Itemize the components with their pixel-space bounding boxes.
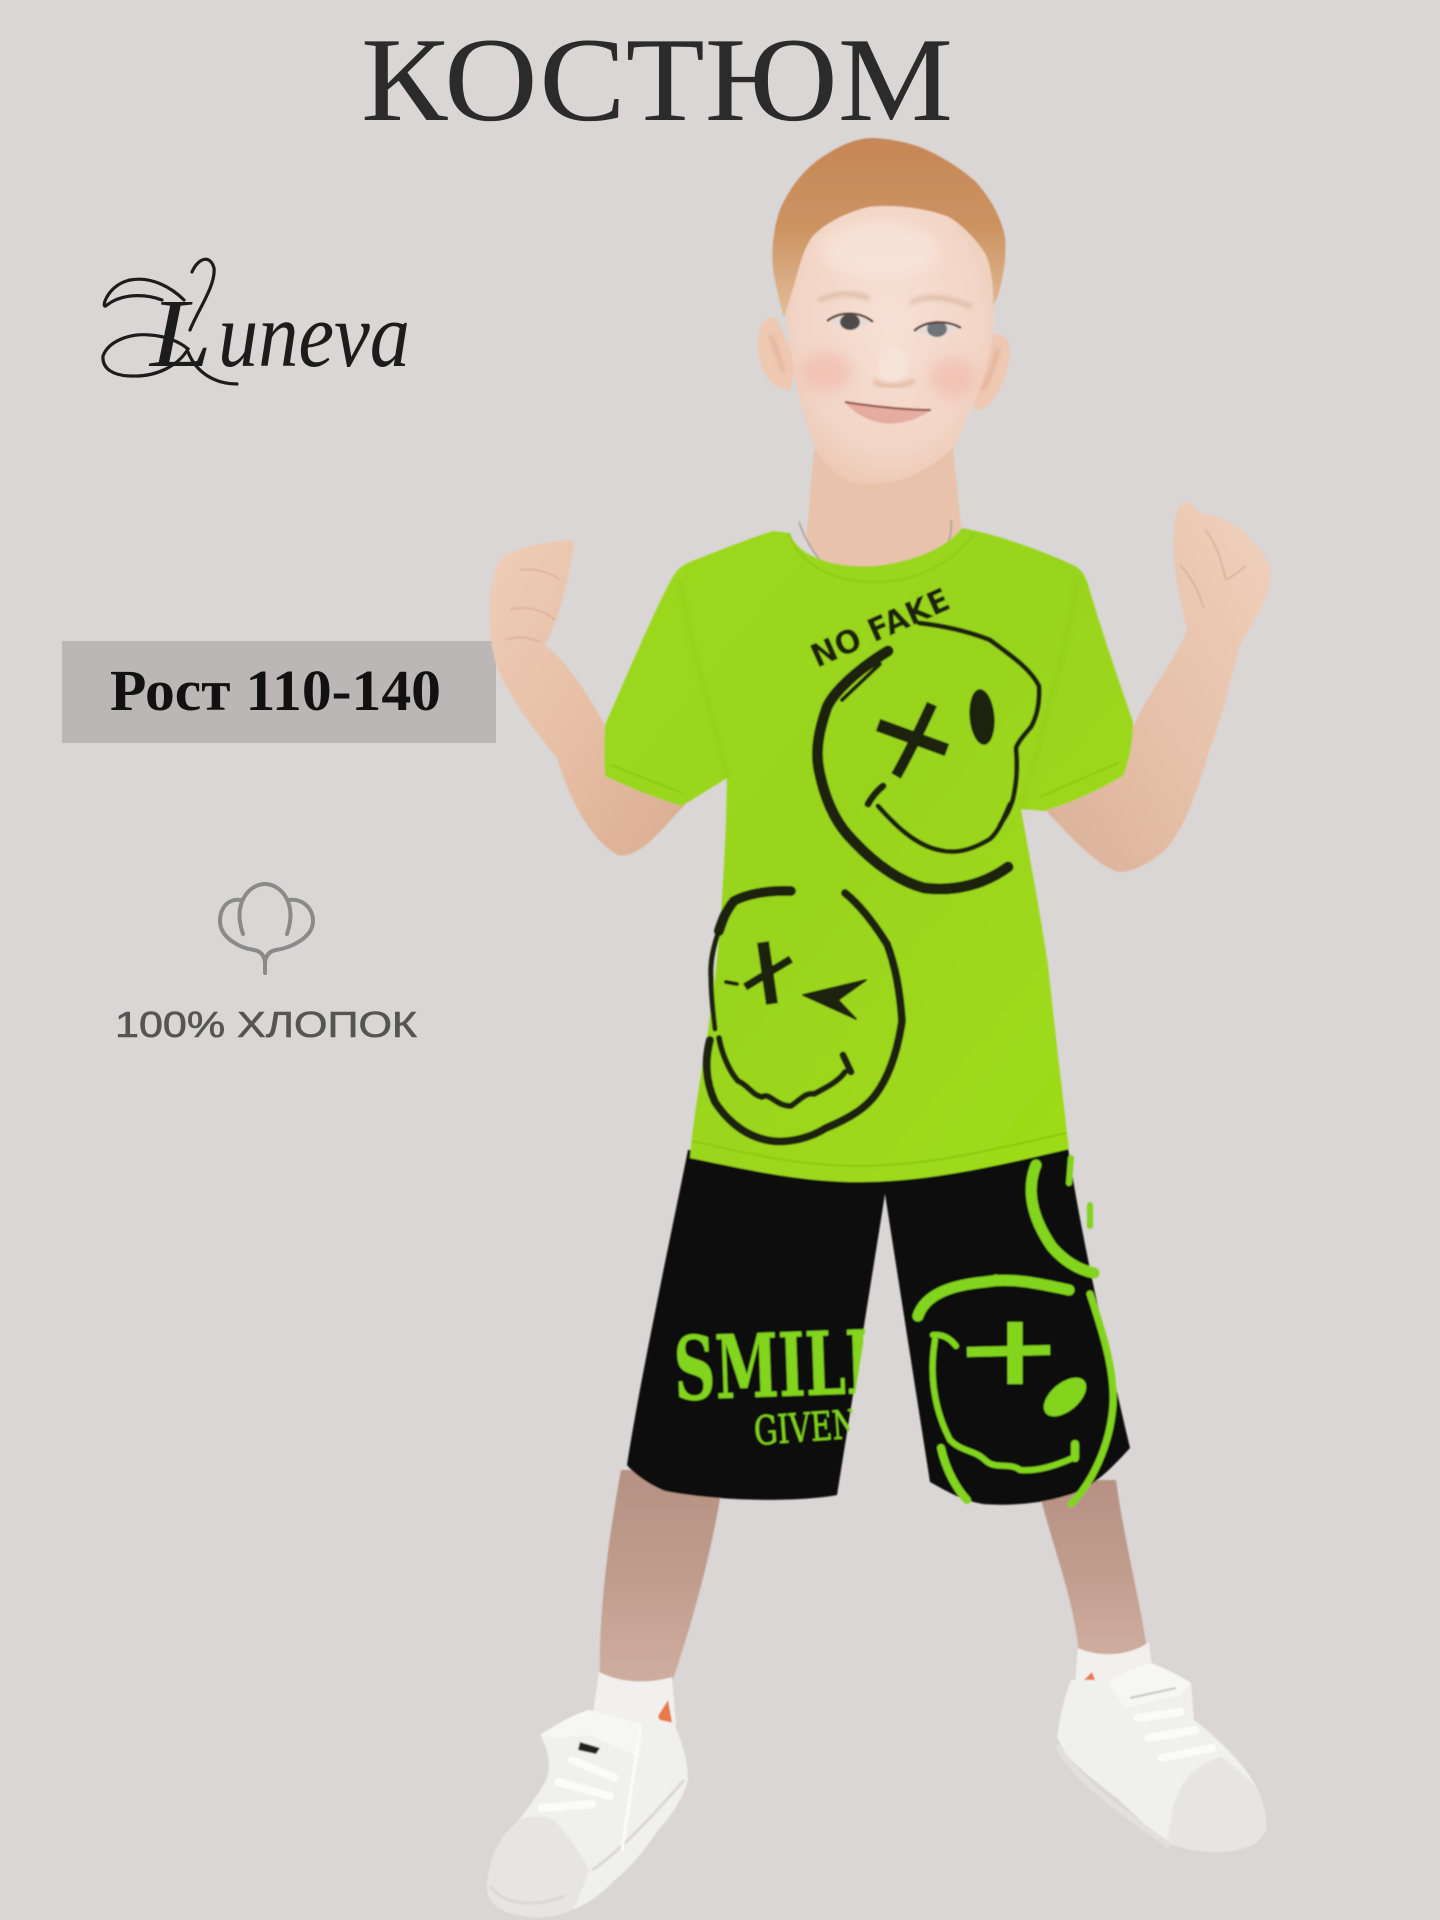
legs: [600, 1470, 1148, 1682]
shorts print: SMILE GIVEN: GIVEN: [752, 1402, 859, 1455]
icon: cotton: [220, 884, 313, 973]
socks: [592, 1642, 1152, 1740]
hair: [772, 138, 1005, 318]
neck: [806, 440, 962, 575]
arms: [489, 502, 1271, 872]
shorts print: large smiley: [918, 1276, 1113, 1504]
nose: [878, 348, 908, 382]
shorts print: SMILE GIVEN: [676, 1328, 866, 1446]
shorts: [627, 1140, 1130, 1505]
shorts print: SMILE GIVEN: SMILE: [672, 1310, 891, 1421]
boy figure: [487, 138, 1271, 1917]
right shoe: [1057, 1663, 1266, 1852]
cotton label: 100% ХЛОПОК: [115, 1004, 417, 1045]
eyebrows: [820, 294, 970, 306]
brand logo: Luneva: [103, 259, 410, 388]
left shoe: [487, 1710, 688, 1917]
head: [784, 190, 996, 484]
height label: [62, 641, 496, 743]
brand logo: Luneva: L: [148, 280, 212, 388]
mouth: [845, 402, 931, 424]
height label: Рост 110-140: [110, 658, 441, 723]
necklace: [799, 520, 951, 568]
brand logo: Luneva: uneva: [218, 284, 410, 386]
shorts print: upper smiley: [1031, 1158, 1094, 1273]
title: КОСТЮМ: [361, 13, 953, 146]
shirt print: lower smiley: [707, 891, 902, 1141]
eyes: [830, 315, 870, 330]
shirt print: NO FAKE: NO FAKE: [805, 580, 955, 675]
shirt print: upper smiley: [817, 623, 1039, 889]
t-shirt: [604, 528, 1133, 1182]
ears: [758, 318, 1010, 411]
